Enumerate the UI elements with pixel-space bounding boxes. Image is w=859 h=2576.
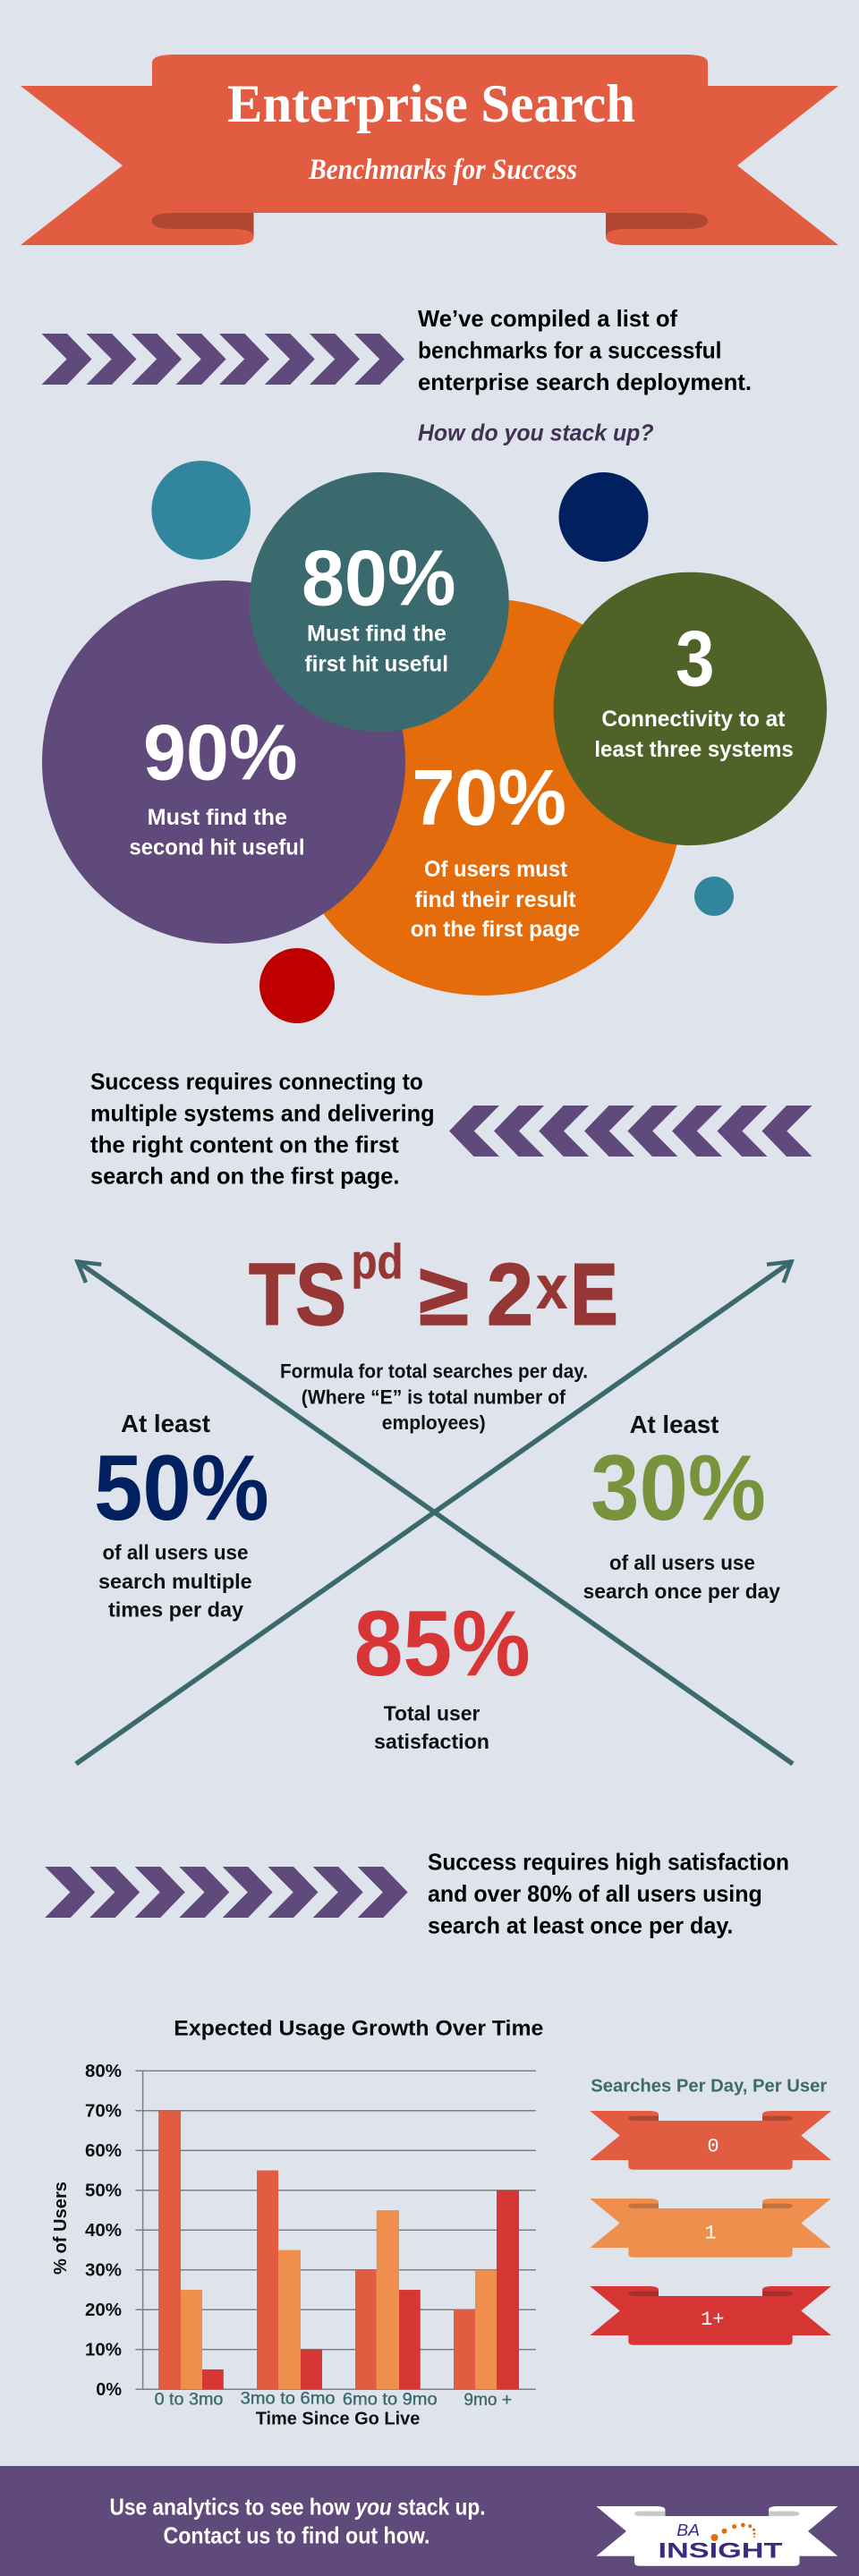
formula: pd — [351, 1233, 403, 1289]
benchmark bubbles — [42, 461, 827, 1023]
formula caption: Formula for total searches per day. — [280, 1360, 588, 1383]
intro text: benchmarks for a successful — [418, 337, 721, 364]
stat: 50% multiple times per day: of all users use — [102, 1541, 248, 1564]
x axis title: Time Since Go Live — [256, 2410, 420, 2429]
stat: 30% once per day: At least — [630, 1411, 719, 1438]
subtitle: Benchmarks for Success — [308, 154, 577, 186]
bubble: 80% teal — [250, 472, 509, 732]
stat 80%: Must find the — [307, 622, 447, 647]
summary text: connecting systems: multiple systems and delivering — [90, 1100, 435, 1127]
formula caption — [280, 1360, 588, 1434]
footer call to action — [109, 2494, 485, 2548]
stat: 30% once per day: search once per day — [583, 1580, 780, 1603]
x axis labels: 0 to 3mo — [155, 2391, 223, 2410]
decorative bubble: red — [259, 948, 335, 1023]
summary text: connecting systems: Success requires connecting to — [90, 1068, 423, 1095]
question: How do you stack up? — [418, 419, 654, 446]
legend title: Searches Per Day, Per User — [591, 2077, 828, 2097]
y axis labels — [85, 2062, 122, 2400]
y axis labels: 80% — [85, 2062, 122, 2081]
chevron arrow: right lower — [45, 1867, 408, 1918]
legend ribbon: 1 search — [590, 2199, 831, 2258]
bubble: 90% purple — [42, 580, 405, 944]
summary text: connecting systems — [90, 1068, 435, 1190]
chevron arrow: left — [449, 1106, 812, 1157]
formula — [249, 1233, 617, 1343]
formula: ≥ — [419, 1245, 469, 1343]
stat: 50% multiple times per day: times per day — [108, 1597, 243, 1621]
logo wordmark: BA: BA — [676, 2521, 700, 2539]
bars: 6mo to 9mo — [355, 2210, 421, 2389]
stat 90%: second hit useful — [129, 835, 304, 860]
formula caption: (Where “E” is total number of — [302, 1386, 566, 1409]
stat 70%: find their result — [415, 887, 576, 912]
summary text: satisfaction — [428, 1849, 789, 1938]
stat: 50% multiple times per day: search multiple — [98, 1570, 252, 1593]
decorative bubble: small teal — [694, 877, 734, 916]
stat 3 — [594, 614, 794, 762]
footer band — [0, 2466, 859, 2576]
stat 70%: on the first page — [411, 917, 580, 942]
decorative bubble: navy — [558, 472, 648, 562]
bars: 0 to 3mo — [158, 2111, 224, 2389]
title banner ribbon — [21, 55, 838, 245]
y axis labels: 40% — [85, 2221, 122, 2241]
stat: 85% satisfaction — [354, 1592, 531, 1753]
stat: 50% multiple times per day: 50% — [94, 1436, 269, 1540]
intro text: enterprise search deployment. — [418, 369, 752, 395]
chevron arrow: right — [41, 334, 404, 385]
legend ribbon: 1+ searches: 1+ — [701, 2309, 725, 2331]
stat: 50% multiple times per day — [94, 1410, 269, 1621]
stat: 50% multiple times per day: At least — [121, 1410, 210, 1437]
stat: 30% once per day — [583, 1411, 780, 1603]
y axis labels: 50% — [85, 2181, 122, 2200]
bars: 9mo + — [454, 2190, 519, 2389]
legend ribbon: 0 searches — [590, 2111, 831, 2170]
stat: 85% satisfaction: 85% — [354, 1592, 531, 1696]
stat 80%: first hit useful — [304, 651, 448, 676]
stat 90% — [129, 708, 304, 860]
stat 70%: 70% — [412, 753, 566, 842]
y axis labels: 0% — [96, 2380, 122, 2400]
intro text — [418, 305, 752, 395]
chart title: Expected Usage Growth Over Time — [174, 2016, 543, 2040]
x axis labels: 6mo to 9mo — [343, 2391, 438, 2410]
stat: 85% satisfaction: satisfaction — [374, 1730, 489, 1753]
summary text: connecting systems: search and on the first page. — [90, 1163, 399, 1190]
logo wordmark: INSIGHT: INSIGHT — [659, 2538, 783, 2563]
logo ribbon — [596, 2506, 838, 2566]
legend ribbon: 0 searches: 0 — [707, 2136, 719, 2158]
decorative bubble: teal — [151, 461, 251, 560]
summary text: satisfaction: and over 80% of all users using — [428, 1880, 762, 1907]
footer call to action: Contact us to find out how. — [163, 2521, 430, 2548]
y axis labels: 60% — [85, 2141, 122, 2161]
stat 90%: 90% — [143, 708, 297, 796]
bars: 3mo to 6mo — [257, 2171, 322, 2389]
x axis labels — [155, 2390, 512, 2410]
stat 3: 3 — [676, 614, 714, 703]
formula caption: employees) — [382, 1411, 486, 1434]
summary text: connecting systems: the right content on the first — [90, 1131, 399, 1157]
footer call to action: Use analytics to see how you stack up. — [109, 2494, 485, 2521]
stat 70% — [411, 753, 580, 942]
stat 80% — [302, 533, 456, 676]
stat 3: least three systems — [594, 737, 794, 762]
crossed arrows — [76, 1261, 793, 1764]
y axis labels: 10% — [85, 2340, 122, 2360]
stat 3: Connectivity to at — [601, 707, 786, 732]
x axis labels: 9mo + — [464, 2391, 512, 2410]
summary text: satisfaction: Success requires high satisfaction — [428, 1849, 789, 1876]
stat: 85% satisfaction: Total user — [384, 1702, 480, 1725]
x axis labels: 3mo to 6mo — [241, 2390, 336, 2409]
y axis title: % of Users — [51, 2182, 71, 2275]
legend ribbon: 1+ searches — [590, 2286, 831, 2345]
logo dots — [710, 2523, 755, 2541]
stat 70%: Of users must — [424, 857, 568, 882]
stat: 30% once per day: 30% — [591, 1436, 766, 1540]
stat 80%: 80% — [302, 533, 456, 622]
y axis labels: 30% — [85, 2260, 122, 2280]
y axis labels: 70% — [85, 2101, 122, 2121]
intro text: We’ve compiled a list of — [418, 305, 677, 332]
bubble: 3 olive — [554, 572, 827, 845]
bar chart — [51, 2062, 536, 2429]
formula: x — [537, 1254, 567, 1322]
stat: 30% once per day: of all users use — [609, 1551, 755, 1574]
bubble: 70% orange — [285, 598, 683, 996]
title: Enterprise Search — [227, 74, 635, 133]
y axis labels: 20% — [85, 2301, 122, 2320]
summary text: satisfaction: search at least once per day. — [428, 1911, 733, 1938]
formula: 2 — [487, 1245, 533, 1343]
stat 90%: Must find the — [148, 805, 287, 830]
formula: E — [571, 1247, 617, 1343]
formula: TS — [249, 1245, 346, 1343]
legend ribbon: 1 search: 1 — [704, 2223, 717, 2245]
